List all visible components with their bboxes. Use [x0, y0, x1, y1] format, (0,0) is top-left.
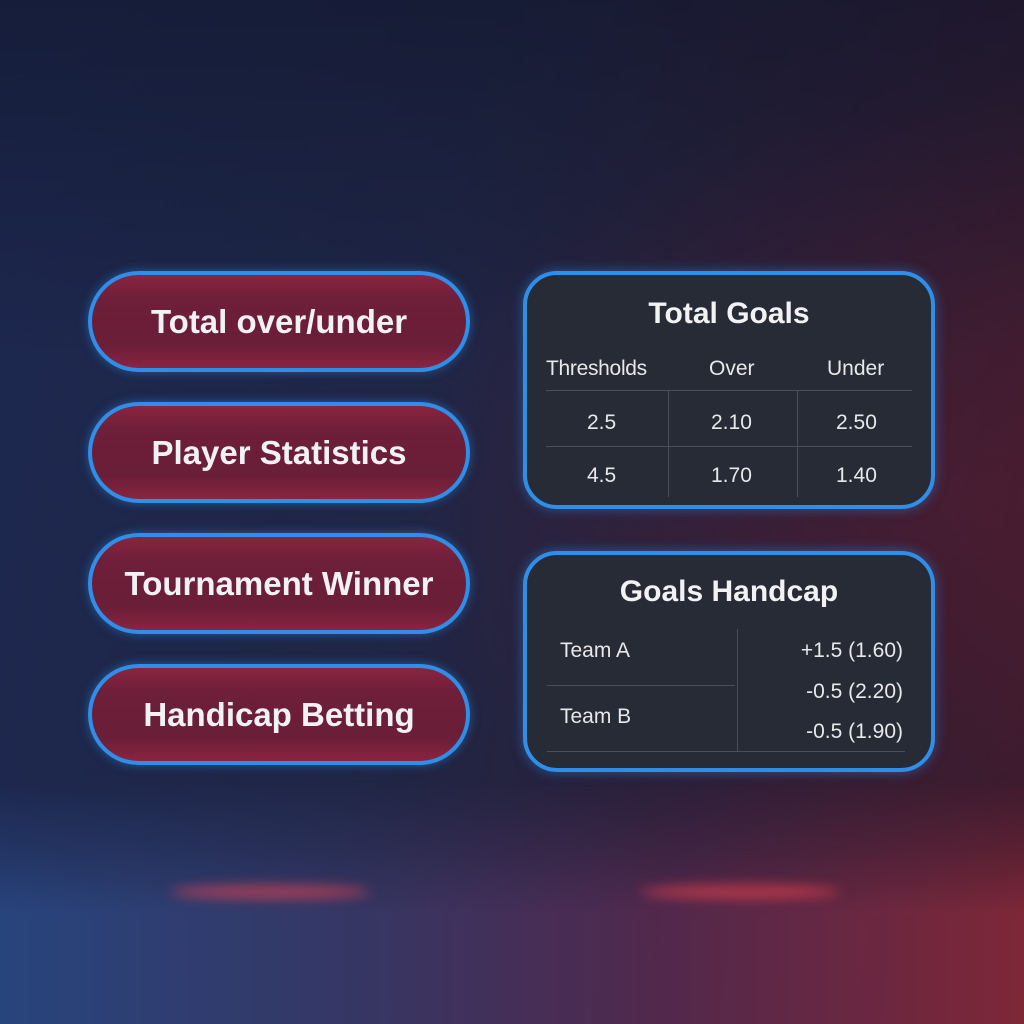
- row Team B: Team B: [560, 705, 631, 728]
- panel: Goals Handcap: [523, 551, 935, 772]
- panel: Total Goals: Over: [709, 357, 755, 380]
- pill: Player Statistics: [88, 402, 470, 503]
- panel: Total Goals: Under: [827, 357, 884, 380]
- row Team A: Team A: [560, 639, 630, 662]
- panel: Total Goals: [523, 271, 935, 509]
- panel: Goals Handcap: +1.5 (1.60): [801, 639, 903, 662]
- pill: Total over/under: [88, 271, 470, 372]
- panel: Total Goals: 2.50: [836, 411, 877, 434]
- panel: Goals Handcap: -0.5 (2.20): [806, 680, 903, 703]
- pill: Tournament Winner: [88, 533, 470, 634]
- pill: Player Statistics: Player Statistics: [152, 434, 406, 470]
- pill: Tournament Winner: Tournament Winner: [125, 564, 433, 602]
- row 4.5: 4.5: [587, 464, 616, 487]
- row 2.5: 2.5: [587, 411, 616, 434]
- panel: Total Goals: 2.10: [711, 411, 752, 434]
- pill: Handicap Betting: [88, 664, 470, 765]
- pill: Total over/under: Total over/under: [151, 302, 407, 340]
- panel: Goals Handcap: -0.5 (1.90): [806, 720, 903, 743]
- heading: Goals Handcap: Goals Handcap: [620, 575, 838, 608]
- table header: Thresholds: [546, 357, 647, 380]
- pill: Handicap Betting: Handicap Betting: [143, 696, 415, 732]
- panel: Total Goals: 1.40: [836, 464, 877, 487]
- heading: Total Goals: Total Goals: [648, 297, 810, 330]
- panel: Total Goals: 1.70: [711, 464, 752, 487]
